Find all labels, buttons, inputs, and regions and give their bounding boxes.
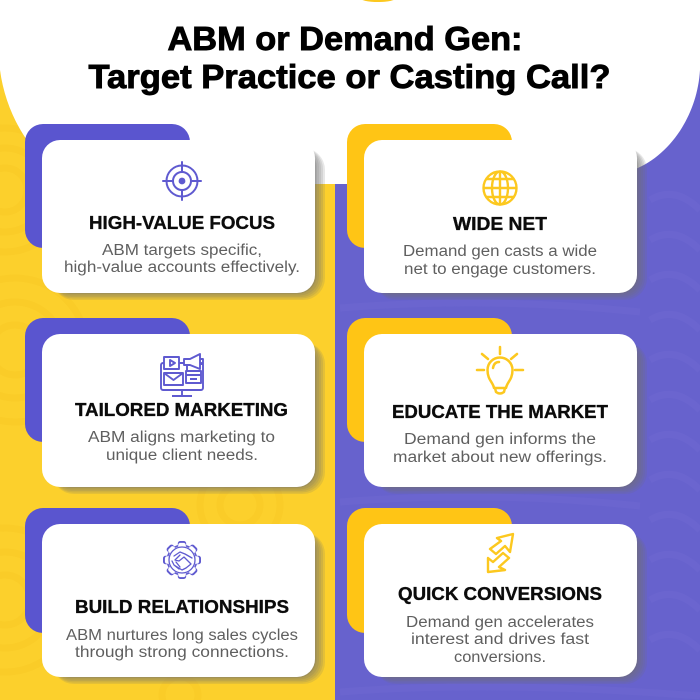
- text block: ABM aligns marketing to: [88, 429, 275, 446]
- heading: WIDE NET: [453, 214, 547, 234]
- top yellow sliver: [360, 0, 396, 2]
- text block: unique client needs.: [106, 447, 258, 464]
- panel: quick conversions: [347, 508, 647, 684]
- panel: wide net: [347, 124, 647, 300]
- icon: globe: [483, 171, 517, 205]
- text block: market about new offerings.: [393, 449, 607, 466]
- icon: light bulb: [477, 347, 523, 394]
- text block: net to engage customers.: [404, 261, 596, 278]
- heading: HIGH-VALUE FOCUS: [89, 213, 275, 233]
- panel: educate the market: [347, 318, 647, 494]
- text block: ABM targets specific,: [102, 242, 262, 259]
- icon: monitor with media and megaphone: [161, 354, 203, 396]
- panel: build relationships: [25, 508, 325, 684]
- icon: opposing arrows: [488, 534, 513, 572]
- title: [88, 20, 610, 95]
- panel: high-value focus: [25, 124, 325, 300]
- text block: Demand gen accelerates: [406, 614, 594, 631]
- title: Target Practice or Casting Call?: [88, 58, 610, 95]
- heading: QUICK CONVERSIONS: [398, 584, 602, 604]
- text block: [406, 614, 594, 666]
- text block: interest and drives fast: [411, 631, 590, 648]
- text block: [403, 243, 597, 278]
- text block: through strong connections.: [75, 644, 289, 661]
- text block: Demand gen informs the: [404, 431, 596, 448]
- text block: [66, 627, 298, 661]
- heading: EDUCATE THE MARKET: [392, 402, 608, 422]
- text block: [64, 242, 300, 276]
- text block: [393, 431, 607, 466]
- text block: Demand gen casts a wide: [403, 243, 597, 260]
- text block: conversions.: [454, 649, 546, 666]
- text block: ABM nurtures long sales cycles: [66, 627, 298, 644]
- text block: [88, 429, 275, 464]
- panel: tailored marketing: [25, 318, 325, 494]
- icon: target: [163, 162, 201, 200]
- title: ABM or Demand Gen:: [168, 20, 522, 57]
- icon: handshake in gear: [163, 541, 201, 579]
- top white blob: [0, 0, 700, 184]
- text block: high-value accounts effectively.: [64, 259, 300, 276]
- heading: BUILD RELATIONSHIPS: [75, 597, 289, 617]
- heading: TAILORED MARKETING: [75, 400, 288, 420]
